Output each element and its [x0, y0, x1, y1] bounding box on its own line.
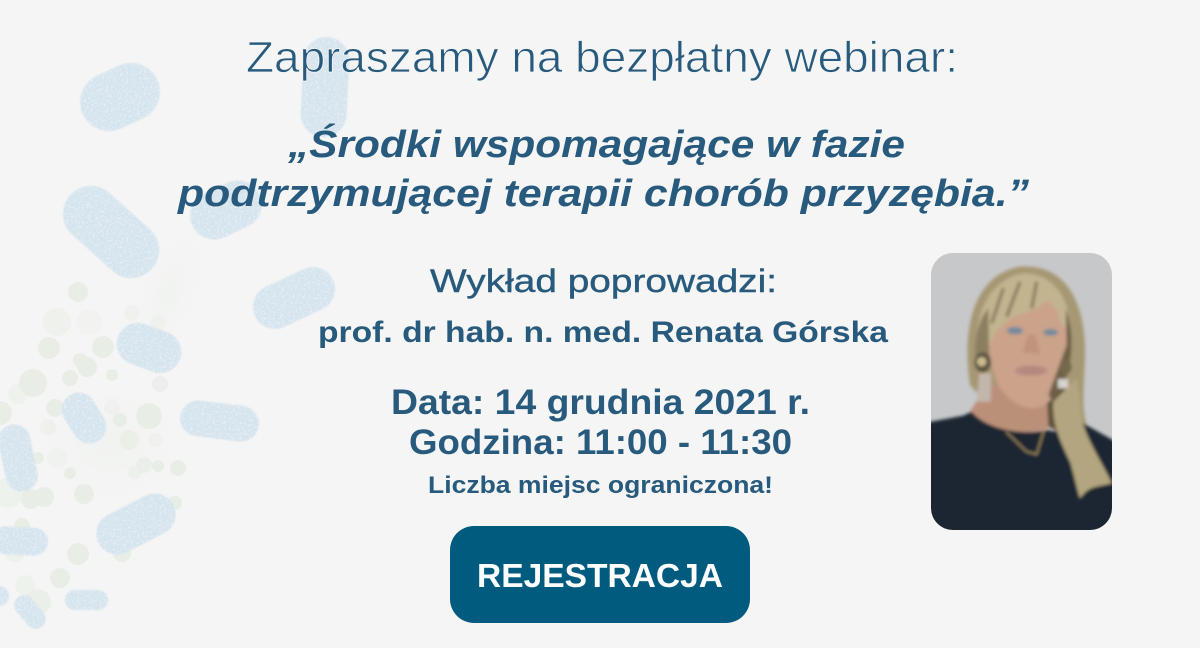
- capsule 11: [0, 526, 49, 556]
- bacteria capsules: [0, 36, 351, 633]
- face: [988, 295, 1070, 408]
- webinar title: [177, 122, 1029, 215]
- registration button: [450, 526, 750, 623]
- fringe streaks: [992, 282, 1037, 323]
- fringe: [977, 273, 1071, 345]
- lecturer: Wykład poprowadzi:: [430, 263, 777, 299]
- lips: [1015, 366, 1047, 376]
- webinar title: „Środki wspomagające w fazie: [287, 122, 905, 166]
- hair shadow left: [975, 308, 989, 360]
- necklace: [1006, 430, 1044, 454]
- intro heading: Zapraszamy na bezpłatny webinar:: [246, 33, 958, 82]
- capsule 3: [51, 174, 171, 290]
- eyes: [1007, 327, 1023, 334]
- capsule 13: [10, 591, 50, 633]
- earring right: [1062, 362, 1073, 374]
- sweater: [931, 410, 1112, 530]
- date and time: [391, 383, 810, 462]
- webinar title: podtrzymującej terapii chorób przyzębia.”: [177, 173, 1029, 215]
- capsule 8: [178, 398, 261, 444]
- hair back: [968, 266, 1087, 445]
- date and time: Data: 14 grudnia 2021 r.: [391, 383, 810, 422]
- date and time: Godzina: 11:00 - 11:30: [409, 423, 792, 462]
- background glow: [10, 196, 237, 525]
- earring left: [974, 352, 991, 372]
- registration button: REJESTRACJA: [477, 557, 723, 594]
- capsule 10: [89, 486, 183, 562]
- hair strand over shoulder: [1053, 378, 1112, 498]
- nose: [1024, 336, 1039, 353]
- lecturer: prof. dr hab. n. med. Renata Górska: [318, 316, 888, 349]
- capsule 4: [182, 173, 270, 247]
- capsule 2: [299, 36, 351, 138]
- dark hair behind neck: [1047, 385, 1067, 432]
- green background dots: [0, 282, 186, 615]
- capsule 7: [55, 386, 113, 450]
- lecturer: [318, 263, 888, 349]
- neck: [970, 385, 1052, 432]
- capsule 1: [71, 53, 169, 141]
- capsule 14: [0, 586, 9, 606]
- capsule 12: [65, 590, 108, 610]
- capsule 5: [246, 260, 342, 336]
- speaker portrait: [931, 253, 1112, 530]
- capsule 9: [0, 421, 41, 495]
- hair shadow right: [1048, 308, 1072, 402]
- capsule 6: [111, 317, 187, 379]
- limited seats note: Liczba miejsc ograniczona!: [428, 472, 773, 499]
